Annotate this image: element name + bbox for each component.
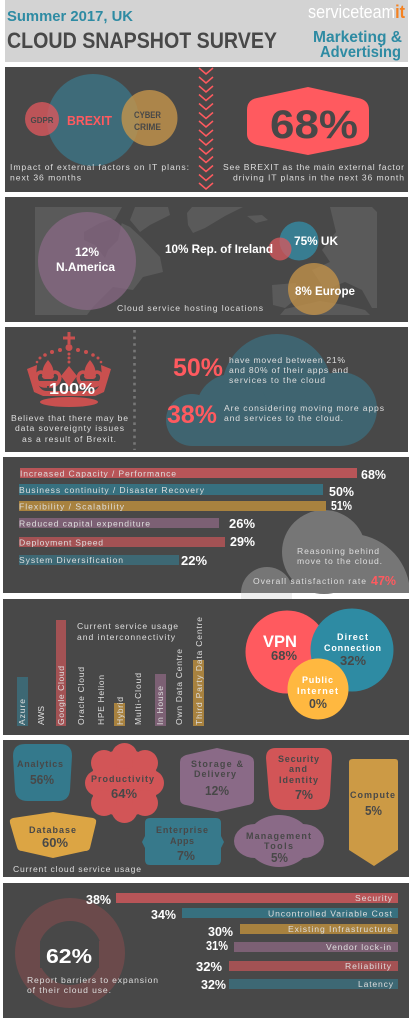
bubble: VPN: 68% [271, 649, 297, 663]
vertical bar chart: AWS [36, 706, 46, 725]
panel: service usage [3, 599, 409, 735]
bar: diversification: 22% [181, 554, 207, 568]
caption: barriers [27, 975, 158, 995]
caption: reasoning [297, 546, 382, 566]
caption: external factors: Impact of external factors on IT plans: [10, 162, 189, 172]
caption: service usage: Current service usage [77, 621, 178, 631]
bubble: public internet: Public [302, 675, 333, 685]
bar: latency [201, 978, 398, 992]
panel: barriers [3, 883, 409, 1018]
bar: capacity [20, 468, 386, 482]
badge: analytics: 56% [30, 773, 54, 787]
sector heading: Advertising [320, 44, 401, 61]
badge: compute [349, 759, 398, 866]
caption: cloud usage: Current cloud service usage [13, 864, 141, 874]
bar: infrastructure [208, 924, 398, 939]
bubble: public internet: Internet [297, 686, 338, 696]
stat: satisfaction: Overall satisfaction rate [253, 576, 366, 586]
badge: security: and [289, 764, 307, 774]
badge: security: 7% [295, 788, 313, 802]
bar: latency: 32% [201, 978, 226, 992]
bubble: public internet: 0% [309, 697, 327, 711]
icon: cloud [166, 334, 377, 446]
badge: 68% [247, 87, 369, 155]
bar: continuity: 50% [329, 485, 354, 499]
dotted divider [133, 330, 136, 450]
stat: 50%: 50% [173, 354, 223, 382]
text: 38%: and services to the cloud. [224, 413, 343, 423]
venn: external factors: GDPR [30, 115, 54, 125]
badge: compute: 5% [365, 804, 382, 818]
panel: cloud service usage [3, 740, 409, 877]
bar: variable cost [151, 908, 398, 922]
caption: barriers: of their cloud use. [27, 985, 111, 995]
bar: infrastructure: 30% [208, 925, 233, 939]
caption: sovereignty [11, 413, 128, 444]
bar: vendor lock-in: Vendor lock-in [326, 942, 391, 952]
text: 50%: and 80% of their apps and [229, 365, 348, 375]
vertical bar chart: Azure [17, 699, 27, 725]
badge: analytics [13, 744, 72, 801]
donut: 62%: 62% [46, 946, 92, 968]
panel: sovereignty and migration [5, 327, 408, 452]
badge: enterprise apps: Apps [170, 836, 194, 846]
bar: security: 38% [86, 893, 111, 907]
text: 38%: Are considering moving more apps [224, 403, 384, 413]
bar: capacity: Increased Capacity / Performance [20, 468, 176, 478]
logo: serviceteamit [308, 2, 405, 22]
caption: sovereignty: data sovereignty issues [15, 423, 124, 433]
bubble: Europe: 8% Europe [295, 284, 355, 298]
vertical bar chart [17, 617, 204, 726]
panel: reasons for moving [3, 457, 409, 599]
vertical bar chart: Multi-Cloud [133, 673, 143, 725]
donut: 62% [26, 910, 114, 996]
vertical bar chart: Oracle Cloud [76, 667, 86, 725]
text: 50%: have moved between 21% [229, 355, 345, 365]
badge: security [266, 748, 332, 810]
vertical bar chart: Google Cloud [56, 666, 66, 725]
bubble: Europe [288, 263, 355, 315]
sector heading [313, 29, 402, 61]
bar: diversification [19, 554, 207, 568]
venn: external factors: CRIME [134, 122, 161, 133]
caption: reasoning: Reasoning behind [297, 546, 379, 556]
bar: continuity [19, 484, 354, 499]
badge: storage: 12% [205, 784, 229, 798]
panel: external factors [5, 67, 408, 192]
bar: capex: Reduced capital expenditure [19, 518, 150, 528]
bubble: direct connection [310, 608, 394, 692]
badge: management tools: Tools [264, 841, 293, 851]
badge: storage [180, 748, 254, 812]
vertical bar chart: In House [155, 686, 165, 725]
stat: satisfaction: 47% [371, 574, 396, 588]
badge: productivity: 64% [111, 787, 137, 801]
chevron divider [199, 68, 213, 189]
badge: productivity: Productivity [91, 774, 154, 784]
bubble: N.America [38, 212, 136, 310]
vertical bar chart: Hybrid [115, 697, 125, 725]
bubble: public internet [288, 658, 348, 720]
badge: database [10, 812, 96, 858]
bubble: UK: 75% UK [294, 234, 338, 248]
badge: compute: Compute [350, 790, 395, 800]
caption: 68% [223, 162, 404, 182]
land shadow [84, 219, 122, 258]
bar: flexibility [19, 499, 352, 513]
badge: productivity [85, 743, 164, 823]
bar: reliability: 32% [196, 960, 222, 974]
badge: enterprise apps: 7% [177, 849, 195, 863]
bar: variable cost: Uncontrolled Variable Cost [268, 908, 393, 918]
bar: capex [19, 517, 255, 531]
badge: management tools [234, 815, 324, 867]
caption: 68%: See BREXIT as the main external factor [223, 162, 404, 172]
bar: deployment: Deployment Speed [19, 538, 103, 548]
bar: security [86, 893, 398, 907]
badge: storage: Storage & [191, 759, 244, 769]
vertical bar chart: HPE Helion [96, 675, 106, 725]
bar: capex: 26% [229, 517, 255, 531]
badge: database: Database [29, 825, 76, 835]
caption: reasoning: move to the cloud. [297, 556, 382, 566]
badge: analytics: Analytics [17, 759, 63, 769]
bar: security: Security [355, 893, 393, 903]
bar: flexibility: Flexibility / Scalability [19, 502, 125, 512]
caption: sovereignty: Believe that there may be [11, 413, 128, 423]
bubble: direct connection: 32% [340, 654, 366, 668]
badge: 68%: 68% [270, 103, 358, 147]
title: CLOUD SNAPSHOT SURVEY [7, 28, 277, 53]
bar: vendor lock-in [206, 939, 398, 953]
badge: enterprise apps: Enterprise [156, 825, 208, 835]
badge: enterprise apps [142, 818, 224, 865]
vertical bar chart: Own Data Centre [174, 649, 184, 725]
venn: external factors: CYBER [134, 110, 161, 121]
bar: deployment: 29% [230, 535, 255, 549]
bar: capacity: 68% [361, 468, 386, 482]
badge: storage: Delivery [194, 769, 236, 779]
badge: security: Security [278, 754, 319, 764]
caption: external factors: next 36 months [10, 172, 81, 182]
bar: flexibility: 51% [331, 499, 352, 513]
caption: service usage [77, 621, 178, 642]
caption: sovereignty: as a result of Brexit. [22, 434, 116, 444]
bubble: direct connection: Direct [337, 632, 368, 642]
bar: reliability [196, 960, 398, 974]
panel: header [5, 0, 408, 62]
vertical bar chart: Third Party Data Centre [194, 617, 204, 725]
badge: management tools: Management [246, 831, 311, 841]
subtitle: Summer 2017, UK [7, 8, 133, 25]
bar: continuity: Business continuity / Disaster Recovery [19, 485, 205, 495]
venn: external factors: BREXIT [67, 113, 112, 128]
bubble: N.America: N.America [56, 260, 115, 274]
bubble: direct connection: Connection [324, 643, 381, 653]
caption: external factors [10, 162, 189, 182]
sector heading: Marketing & [313, 29, 402, 46]
venn: external factors [25, 74, 178, 166]
bubble: VPN: VPN [263, 633, 297, 651]
bar: diversification: System Diversification [19, 555, 123, 565]
bar: vendor lock-in: 31% [206, 939, 228, 953]
icon: crown [27, 332, 111, 407]
bar: latency: Latency [358, 979, 394, 989]
badge: management tools: 5% [271, 851, 288, 865]
stat: 38%: 38% [167, 401, 217, 429]
bubble: VPN [246, 610, 328, 694]
label: Ireland: 10% Rep. of Ireland [165, 242, 273, 256]
caption: 68%: driving IT plans in the next 36 month [233, 172, 404, 182]
stat: 100%: 100% [49, 381, 95, 398]
caption: hosting: Cloud service hosting locations [117, 303, 263, 313]
text: 50% [229, 355, 348, 385]
caption: barriers: Report barriers to expansion [27, 975, 158, 985]
bar: variable cost: 34% [151, 908, 176, 922]
bar: infrastructure: Existing Infrastructure [288, 924, 392, 934]
bar: deployment [19, 535, 255, 549]
caption: service usage: and interconnectivity [77, 632, 176, 642]
world map [35, 207, 377, 315]
cloud: reasoning [241, 510, 409, 599]
stat: satisfaction [253, 574, 396, 588]
badge: security: Identity [279, 775, 318, 785]
text: 50%: services to the cloud [229, 375, 325, 385]
bubble: UK [268, 222, 338, 260]
bar: reliability: Reliability [345, 961, 392, 971]
badge: database: 60% [42, 836, 68, 850]
panel: hosting locations [5, 197, 408, 322]
text: 38% [224, 403, 384, 423]
bubble: N.America: 12% [75, 245, 99, 259]
